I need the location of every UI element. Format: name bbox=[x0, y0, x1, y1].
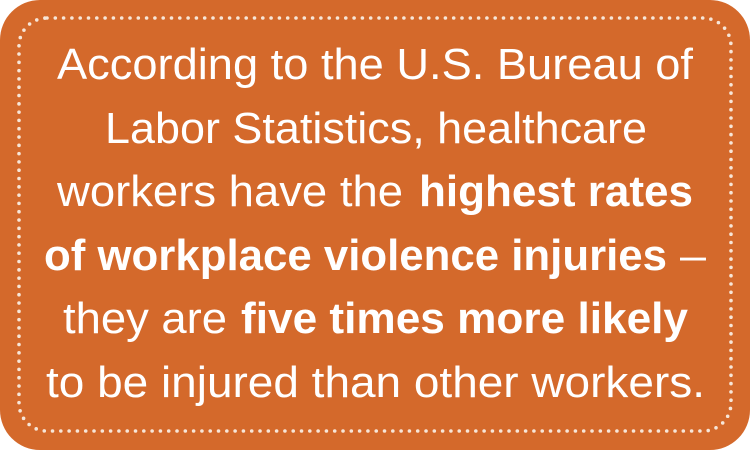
text block: statistic statement: they are bbox=[63, 294, 227, 343]
text block: statistic statement: five times more likely bbox=[241, 294, 689, 343]
text block: statistic statement: Labor Statistics, healthcare bbox=[105, 104, 647, 153]
text block: statistic statement: workers have the bbox=[56, 167, 403, 216]
text block: statistic statement: to be injured than other workers. bbox=[46, 358, 705, 407]
text block: statistic statement: of workplace violence injuries bbox=[44, 231, 667, 280]
text block: statistic statement: – bbox=[680, 231, 707, 280]
text block: statistic statement: According to the U.S. Bureau of bbox=[57, 40, 694, 89]
text block: statistic statement bbox=[44, 40, 707, 407]
text block: statistic statement: highest rates bbox=[419, 167, 693, 216]
